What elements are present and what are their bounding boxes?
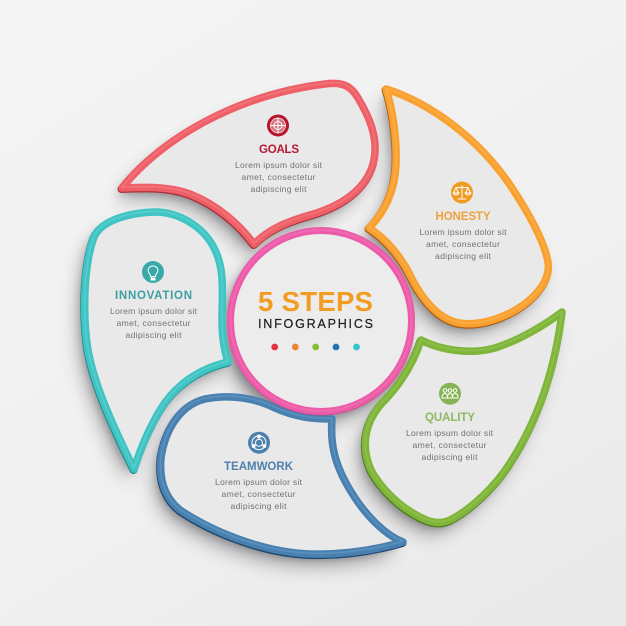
heading: 5 steps: 5 STEPS: [258, 286, 373, 317]
panel: quality: [365, 311, 562, 523]
contact shadows: [81, 89, 558, 560]
panel: goals: [122, 82, 375, 245]
text: quality body: adipiscing elit: [422, 452, 478, 462]
drop shadows: [78, 95, 555, 566]
panel: innovation: [84, 211, 228, 470]
text: teamwork body: amet, consectetur: [222, 489, 296, 499]
text: goals body: [235, 160, 323, 194]
panel: teamwork: [160, 396, 403, 555]
text: honesty body: amet, consectetur: [426, 239, 500, 249]
text: innovation body: [110, 306, 198, 340]
text: quality body: Lorem ipsum dolor sit: [406, 428, 494, 438]
text: teamwork body: [215, 477, 303, 511]
heading: goals: GOALS: [259, 144, 299, 156]
text: quality body: amet, consectetur: [412, 440, 487, 450]
step dots: [271, 344, 360, 350]
icon: light bulb: [142, 261, 164, 283]
text: innovation body: Lorem ipsum dolor sit: [110, 306, 198, 316]
icon: scales: [451, 182, 473, 204]
panel: honesty: [368, 88, 548, 325]
heading: teamwork: TEAMWORK: [224, 461, 294, 473]
heading: infographics: INFOGRAPHICS: [258, 317, 373, 331]
text: honesty body: adipiscing elit: [435, 251, 492, 261]
heading: quality: QUALITY: [425, 412, 475, 424]
text: goals body: amet, consectetur: [242, 172, 316, 182]
panel: center circle: [230, 230, 412, 412]
text: innovation body: adipiscing elit: [126, 330, 182, 340]
text: teamwork body: adipiscing elit: [230, 501, 287, 511]
icon: target: [267, 114, 289, 136]
text: goals body: adipiscing elit: [250, 184, 307, 194]
text: teamwork body: Lorem ipsum dolor sit: [215, 477, 303, 487]
text: innovation body: amet, consectetur: [116, 318, 191, 328]
text: quality body: [406, 428, 494, 462]
icon: teamwork gears: [248, 432, 270, 454]
heading: innovation: INNOVATION: [115, 290, 192, 302]
heading: honesty: HONESTY: [436, 211, 491, 223]
text: honesty body: Lorem ipsum dolor sit: [420, 227, 507, 237]
icon: people: [439, 383, 461, 405]
text: honesty body: [420, 227, 507, 261]
text: goals body: Lorem ipsum dolor sit: [235, 160, 323, 170]
